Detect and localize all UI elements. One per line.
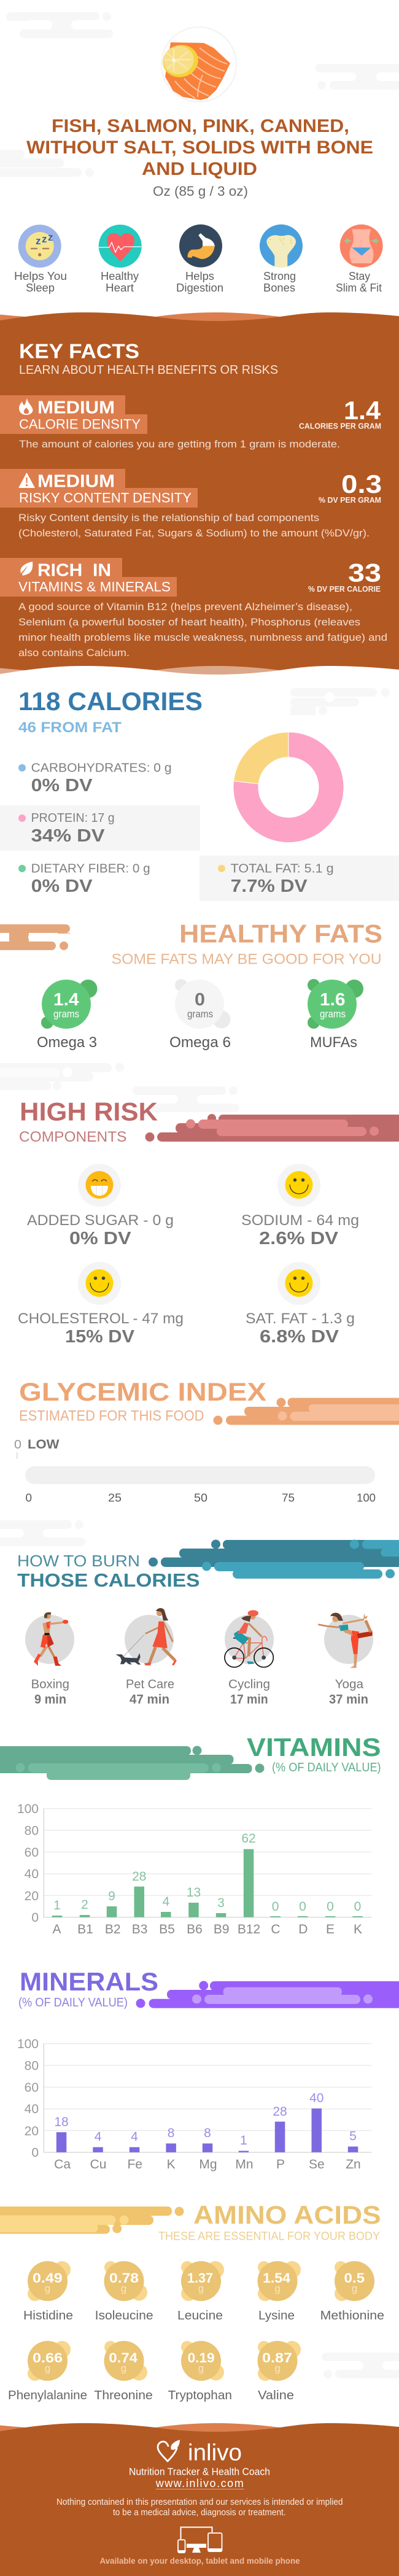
amino: tryptophan: 0.19 [188, 2350, 215, 2365]
minerals subheading: (% OF DAILY VALUE) [18, 1996, 128, 2009]
fact: rich in vitamins and minerals: also contains Calcium. [18, 647, 130, 659]
key facts subheading: LEARN ABOUT HEALTH BENEFITS OR RISKS [19, 363, 278, 377]
mufas: 1.6 [320, 990, 345, 1010]
glycemic scale labels: 50 [194, 1491, 207, 1504]
logo: inlivo [158, 2440, 242, 2466]
risk: cholesterol: CHOLESTEROL - 47 mg [18, 1310, 184, 1327]
bar chart: minerals: 5 [349, 2129, 357, 2143]
amino: lysine: g [274, 2283, 281, 2294]
fact: risky content density: Risky Content density is the relationship of bad components [18, 512, 319, 524]
bar chart: vitamins: D [298, 1922, 308, 1936]
fact: rich in vitamins and minerals: RICH IN [37, 561, 111, 581]
bar chart: vitamins: B9 [214, 1922, 230, 1936]
macro: protein: PROTEIN: 17 g [31, 811, 115, 825]
bar chart: vitamins: 62 [241, 1831, 256, 1846]
panel: vitamins [0, 1733, 381, 1936]
amino: lysine: 1.54 [263, 2270, 290, 2286]
amino: threonine: 0.74 [109, 2350, 138, 2365]
bar chart: vitamins: 80 [25, 1824, 39, 1838]
omega 3: Omega 3 [37, 1034, 97, 1051]
bar chart: vitamins [17, 1802, 371, 1936]
amino: threonine: g [121, 2362, 126, 2374]
macro: total fat: TOTAL FAT: 5.1 g [231, 862, 334, 875]
amino: valine [258, 2341, 301, 2402]
high risk heading: HIGH RISK [20, 1097, 158, 1126]
amino: leucine: Leucine [177, 2309, 223, 2323]
glycemic value marker: LOW [28, 1437, 60, 1452]
serving size subtitle: Oz (85 g / 3 oz) [153, 184, 248, 199]
bar chart: minerals: 0 [31, 2146, 39, 2160]
macro: total fat: 7.7% DV [231, 876, 308, 896]
glycemic value marker [14, 1437, 60, 1459]
bar chart: minerals: 1 [240, 2133, 247, 2148]
icon: helps you sleep: z [42, 233, 47, 245]
vitamins heading: VITAMINS [247, 1733, 381, 1762]
bar chart: minerals: 4 [95, 2130, 102, 2144]
panel: footer [0, 2423, 399, 2576]
high risk decorative bars [145, 1114, 399, 1142]
amino: histidine: Histidine [23, 2309, 73, 2323]
fact: calorie density: CALORIE DENSITY [19, 416, 141, 432]
bar chart: vitamins: 0 [272, 1900, 279, 1914]
amino: tryptophan [168, 2341, 232, 2402]
amino: histidine: g [45, 2283, 50, 2294]
healthy fats decorative bars [0, 924, 70, 950]
amino: phenylalanine: g [45, 2362, 50, 2374]
availability note: Available on your desktop, tablet and mobile phone [99, 2556, 300, 2566]
amino: leucine [177, 2261, 224, 2323]
risk: saturated fat [246, 1262, 355, 1347]
glycemic decorative bars [214, 1398, 399, 1425]
risk: sodium: SODIUM - 64 mg [241, 1212, 359, 1229]
macro: dietary fiber [18, 862, 150, 896]
omega 6 [169, 979, 231, 1051]
amino acids decorative bars [0, 2207, 184, 2234]
bar chart: vitamins: 0 [327, 1900, 334, 1914]
amino: isoleucine [95, 2261, 153, 2323]
icon: stay slim and fit [340, 225, 383, 268]
risk: added sugar: 0% DV [69, 1229, 131, 1248]
bar chart: vitamins: 100 [17, 1802, 39, 1816]
icon: strong bones [260, 225, 303, 268]
bar chart: minerals [17, 2037, 371, 2172]
amino: phenylalanine: 0.66 [33, 2350, 63, 2365]
glycemic scale labels: 0 [26, 1491, 32, 1504]
activity: cycling: Cycling [228, 1678, 270, 1692]
glycemic scale labels: 100 [357, 1491, 376, 1504]
amino: methionine: 0.5 [344, 2270, 365, 2286]
fact: calorie density: CALORIES PER GRAM [299, 421, 381, 431]
glycemic heading: GLYCEMIC INDEX [19, 1377, 266, 1406]
bar chart: vitamins: B3 [132, 1922, 147, 1936]
bar chart: minerals: 100 [17, 2037, 39, 2051]
fact: calorie density [0, 395, 381, 450]
icon: devices [178, 2528, 222, 2553]
glycemic scale bar [25, 1466, 375, 1484]
vitamins subheading: (% OF DAILY VALUE) [272, 1761, 381, 1774]
benefit labels: Sleep [26, 282, 55, 294]
bar chart: minerals: Ca [54, 2157, 71, 2172]
bar chart: vitamins: K [354, 1922, 362, 1936]
amino: phenylalanine: Phenylalanine [8, 2389, 87, 2402]
bar chart: vitamins: 9 [108, 1889, 115, 1903]
bar chart: vitamins: 1 [53, 1898, 61, 1913]
risk: saturated fat: 6.8% DV [260, 1327, 339, 1347]
disclaimer: Nothing contained in this presentation and our services is intended or implied [56, 2497, 343, 2507]
fact: risky content density: % DV PER GRAM [319, 495, 381, 505]
risk: sodium [241, 1164, 359, 1248]
omega 6: 0 [195, 990, 205, 1010]
fact: risky content density [0, 469, 382, 539]
amino: histidine: 0.49 [33, 2270, 63, 2286]
amino: phenylalanine [8, 2341, 87, 2402]
high risk subheading: COMPONENTS [19, 1129, 126, 1145]
benefit labels: Stay [349, 270, 370, 282]
glycemic value marker: 0 [14, 1438, 21, 1452]
bar chart: minerals: Se [309, 2157, 325, 2172]
fact: rich in vitamins and minerals [0, 558, 387, 659]
panel: amino acids [0, 2200, 384, 2402]
icon: healthy heart [99, 225, 142, 268]
tagline: Nutrition Tracker & Health Coach [129, 2466, 270, 2477]
bar chart: minerals: Cu [90, 2157, 106, 2172]
amino: tryptophan: g [198, 2362, 204, 2374]
bar chart: vitamins: 40 [25, 1867, 39, 1881]
panel: key facts [0, 312, 399, 684]
panel: health benefit icons [14, 225, 383, 294]
activity: pet care [115, 1608, 177, 1706]
burn decorative bars [149, 1539, 399, 1579]
minerals heading: MINERALS [20, 1967, 158, 1996]
macro: dietary fiber: DIETARY FIBER: 0 g [31, 862, 150, 875]
amino: threonine [94, 2341, 153, 2402]
omega 6: grams [187, 1008, 213, 1020]
benefit labels: Helps [185, 270, 214, 282]
macro: carbohydrates [18, 761, 172, 795]
glycemic subheading: ESTIMATED FOR THIS FOOD [19, 1408, 204, 1424]
website link: www.inlivo.com [155, 2477, 244, 2489]
bar chart: vitamins: E [326, 1922, 335, 1936]
fact: calorie density: 1.4 [344, 396, 381, 425]
benefit labels: Bones [263, 282, 295, 294]
fact: risky content density: 0.3 [341, 470, 382, 498]
icon: helps you sleep: z [36, 235, 41, 247]
macro: carbohydrates: CARBOHYDRATES: 0 g [31, 761, 172, 775]
title: WITHOUT SALT, SOLIDS WITH BONE [26, 137, 373, 158]
bar chart: minerals: Mg [199, 2157, 217, 2172]
bar chart: vitamins: 2 [81, 1898, 88, 1912]
bar chart: minerals: 60 [25, 2081, 39, 2095]
glycemic scale labels: 25 [108, 1491, 122, 1504]
calories from fat: 46 FROM FAT [18, 719, 122, 736]
bar chart: minerals: 40 [309, 2091, 323, 2105]
bar chart: minerals: Mn [235, 2157, 254, 2172]
amino: isoleucine: 0.78 [109, 2270, 139, 2286]
omega 6: Omega 6 [169, 1034, 231, 1051]
macro: protein [0, 805, 200, 851]
benefit labels [14, 270, 382, 294]
amino: valine: g [274, 2362, 281, 2374]
disclaimer [56, 2497, 343, 2518]
bar chart: vitamins: 20 [25, 1889, 39, 1903]
amino acids heading: AMINO ACIDS [193, 2200, 381, 2229]
glycemic scale labels: 75 [282, 1491, 295, 1504]
panel: high risk components [18, 1097, 399, 1347]
bar chart: minerals: 20 [25, 2124, 39, 2138]
fact: calorie density: The amount of calories you are getting from 1 gram is moderate. [19, 438, 340, 450]
amino: valine: Valine [258, 2389, 294, 2402]
bar chart: minerals: Zn [346, 2157, 361, 2172]
bar chart: vitamins: 0 [31, 1911, 39, 1925]
amino: lysine [258, 2261, 301, 2323]
fact: rich in vitamins and minerals: Selenium (a powerful booster of heart health), Phosphorus (releaves [18, 616, 360, 628]
amino: isoleucine: Isoleucine [95, 2309, 153, 2323]
risk: added sugar [27, 1164, 174, 1248]
fact: rich in vitamins and minerals: A good source of Vitamin B12 (helps prevent Alzheimer’s disease), [18, 601, 352, 613]
title: FISH, SALMON, PINK, CANNED, [52, 116, 349, 136]
bar chart: vitamins: 28 [132, 1870, 146, 1884]
donut chart: calorie split [233, 732, 344, 843]
risk: saturated fat: SAT. FAT - 1.3 g [246, 1310, 355, 1327]
fact: risky content density: (Cholesterol, Saturated Fat, Sugars & Sodium) to the amount (%DV/gr). [18, 527, 370, 539]
omega 3: grams [53, 1008, 79, 1020]
burn heading line 2: THOSE CALORIES [17, 1569, 200, 1591]
activity: cycling: 17 min [230, 1693, 268, 1706]
macro: protein: 34% DV [31, 826, 105, 846]
amino: tryptophan: Tryptophan [168, 2389, 232, 2402]
amino: methionine: g [352, 2283, 357, 2294]
hero image: salmon fillet with lemon slice [159, 27, 236, 102]
bar chart: vitamins: 4 [162, 1895, 169, 1909]
activity: pet care: 47 min [130, 1693, 169, 1706]
macro: dietary fiber: 0% DV [31, 876, 93, 896]
fact: risky content density: RISKY CONTENT DENSITY [19, 490, 192, 506]
bar chart: minerals: 40 [25, 2102, 39, 2116]
amino: valine: 0.87 [262, 2350, 292, 2365]
amino: lysine: Lysine [258, 2309, 295, 2323]
amino: histidine [23, 2261, 73, 2323]
bar chart: vitamins: B6 [187, 1922, 203, 1936]
fact: risky content density: MEDIUM [37, 471, 115, 491]
panel: minerals [17, 1967, 399, 2172]
risk: cholesterol: 15% DV [65, 1327, 135, 1347]
benefit labels: Strong [263, 270, 296, 282]
icon: helps you sleep [18, 225, 61, 268]
amino: leucine: g [198, 2283, 204, 2294]
activity: pet care: Pet Care [126, 1678, 174, 1692]
bar chart: minerals: K [167, 2157, 176, 2172]
benefit labels: Helps You [14, 270, 67, 282]
benefit labels: Digestion [176, 282, 223, 294]
glycemic scale labels [26, 1491, 376, 1504]
activity: boxing: 9 min [34, 1693, 66, 1706]
amino: methionine: Methionine [320, 2309, 384, 2323]
title: AND LIQUID [142, 159, 257, 179]
vitamins decorative bars [0, 1746, 264, 1780]
bar chart: vitamins: B1 [77, 1922, 93, 1936]
bar chart: minerals: 8 [204, 2126, 211, 2140]
amino: methionine [320, 2261, 384, 2323]
benefit labels: Slim & Fit [336, 282, 382, 294]
bar chart: vitamins: B12 [238, 1922, 260, 1936]
fact: rich in vitamins and minerals: 33 [348, 559, 381, 587]
bar chart: vitamins: B2 [105, 1922, 121, 1936]
icon: flame [19, 398, 33, 415]
activity: yoga: 37 min [329, 1693, 368, 1706]
minerals decorative bars [136, 1981, 399, 2008]
calories heading: 118 CALORIES [18, 687, 203, 716]
key facts heading: KEY FACTS [19, 340, 139, 362]
bar chart: minerals: 4 [131, 2130, 138, 2144]
activity: yoga: Yoga [335, 1678, 364, 1692]
macro: carbohydrates: 0% DV [31, 776, 93, 795]
risk: cholesterol [18, 1262, 184, 1347]
mufas: MUFAs [310, 1034, 357, 1051]
panel: calories [0, 687, 399, 901]
icon: warning triangle [18, 473, 35, 488]
bar chart: minerals: P [276, 2157, 285, 2172]
panel: glycemic index [14, 1377, 399, 1504]
bar chart: vitamins: A [52, 1922, 61, 1936]
bar chart: vitamins: 60 [25, 1846, 39, 1860]
macro: total fat [200, 856, 399, 901]
bar chart: vitamins: 3 [217, 1896, 225, 1910]
icon: helps you sleep: z [48, 231, 53, 243]
bar chart: vitamins: 13 [187, 1886, 201, 1900]
bar chart: minerals: 28 [273, 2105, 287, 2119]
healthy fats heading: HEALTHY FATS [179, 919, 382, 948]
fact: rich in vitamins and minerals: VITAMINS & MINERALS [18, 579, 171, 594]
logo: inlivo: inlivo [188, 2440, 242, 2466]
activity: boxing: Boxing [31, 1678, 69, 1692]
bar chart: minerals: 8 [168, 2126, 174, 2140]
omega 3 [37, 980, 97, 1051]
bar chart: vitamins: 0 [354, 1900, 361, 1914]
activity: yoga [318, 1613, 373, 1706]
activity: cycling [225, 1610, 274, 1706]
bar chart: minerals: 80 [25, 2059, 39, 2073]
amino: isoleucine: g [121, 2283, 126, 2294]
fact: calorie density: MEDIUM [37, 398, 115, 417]
risk: sodium: 2.6% DV [259, 1229, 339, 1248]
healthy fats subheading: SOME FATS MAY BE GOOD FOR YOU [112, 951, 382, 967]
bar chart: minerals: 18 [54, 2115, 69, 2129]
burn heading line 1: HOW TO BURN [17, 1552, 140, 1570]
panel: healthy fats [0, 919, 382, 1051]
benefit labels: Heart [106, 282, 134, 294]
bar chart: minerals: Fe [127, 2157, 142, 2172]
bar chart: vitamins: C [271, 1922, 281, 1936]
mufas: grams [320, 1008, 346, 1020]
bar chart: vitamins: B5 [159, 1922, 175, 1936]
activity: boxing [25, 1612, 74, 1706]
fact: rich in vitamins and minerals: minor health problems like muscle weakness, numbness and fatigue) and [18, 632, 387, 643]
icon: leaf [20, 562, 33, 576]
amino: threonine: Threonine [94, 2389, 153, 2402]
disclaimer: to be a medical advice, diagnosis or treatment. [113, 2508, 286, 2518]
benefit labels: Healthy [101, 270, 139, 282]
icon: helps digestion [179, 225, 222, 268]
amino acids subheading: THESE ARE ESSENTIAL FOR YOUR BODY [158, 2230, 380, 2243]
omega 3: 1.4 [53, 990, 79, 1010]
risk: added sugar: ADDED SUGAR - 0 g [27, 1212, 174, 1229]
amino: leucine: 1.37 [187, 2270, 213, 2286]
fact: rich in vitamins and minerals: % DV PER CALORIE [308, 584, 381, 594]
mufas [308, 979, 363, 1051]
panel: how to burn those calories [17, 1539, 399, 1706]
bar chart: vitamins: 0 [299, 1900, 306, 1914]
title [26, 116, 373, 179]
